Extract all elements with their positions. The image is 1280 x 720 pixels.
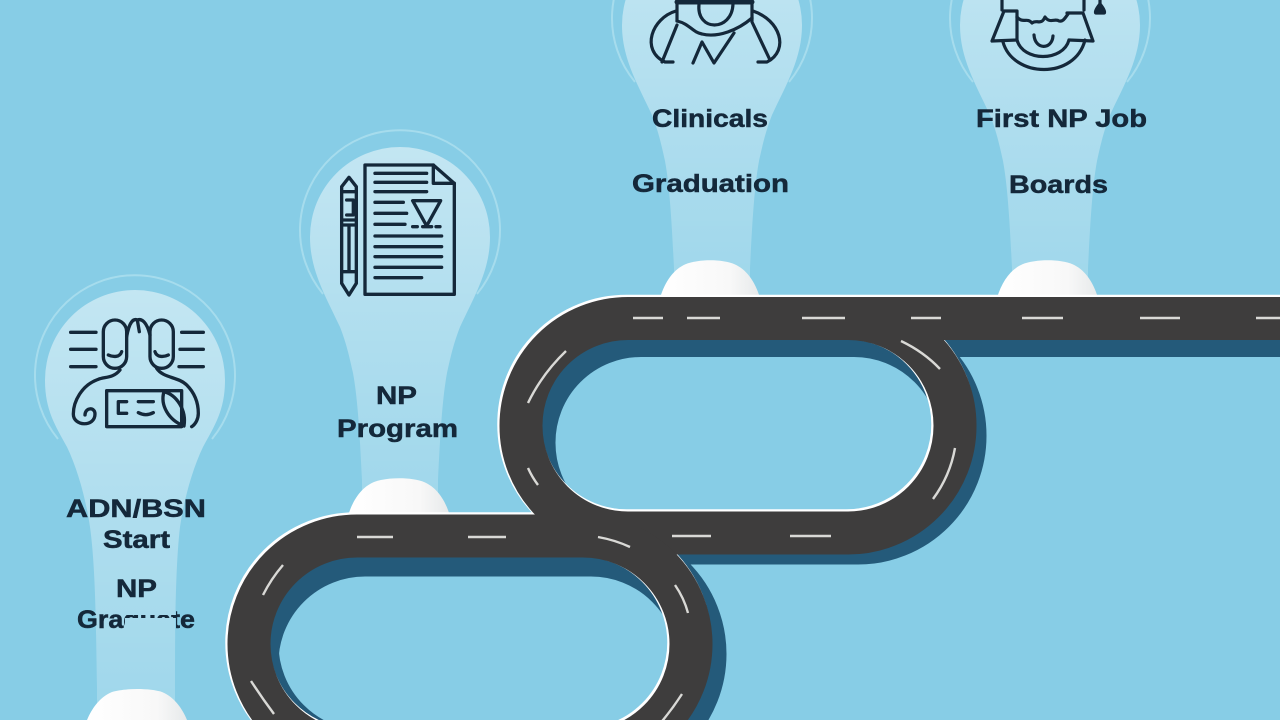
bulb: clinicals and graduation: [612, 0, 812, 290]
milestone mound 3: [660, 260, 760, 298]
icon: graduate face: [992, 0, 1105, 70]
label: Boards: Boards: [1009, 171, 1108, 199]
label: Graduation: Graduation: [632, 170, 789, 198]
milestone mound 2: [348, 478, 450, 516]
bulb: NP program: [300, 130, 500, 510]
icon: clinician: [651, 0, 780, 63]
winding road: [248, 317, 1280, 720]
label: NP graduate garbled: Graduate: [77, 606, 195, 634]
label: First NP Job: First NP Job: [976, 105, 1147, 133]
road highlight edge: [248, 317, 1280, 720]
lane dashes: [251, 318, 1280, 720]
icon: document and pencil: [342, 165, 454, 295]
bulb: ADN/BSN start: [35, 275, 235, 720]
road shadow: [257, 328, 1280, 720]
icon: stethoscope and clipboard: [71, 320, 203, 427]
bulb: first NP job boards: [950, 0, 1150, 290]
label: Start: Start: [103, 526, 171, 554]
label: NP program line 1: NP: [376, 382, 417, 410]
label: ADN/BSN: ADN/BSN: [66, 495, 206, 523]
road surface: [249, 318, 1280, 720]
label: NP: NP: [116, 575, 157, 603]
milestone mound 1: [87, 689, 187, 720]
label: NP program line 2: Program: [337, 415, 458, 443]
label: Clinicals: Clinicals: [652, 105, 768, 133]
milestone mound 4: [997, 260, 1098, 298]
